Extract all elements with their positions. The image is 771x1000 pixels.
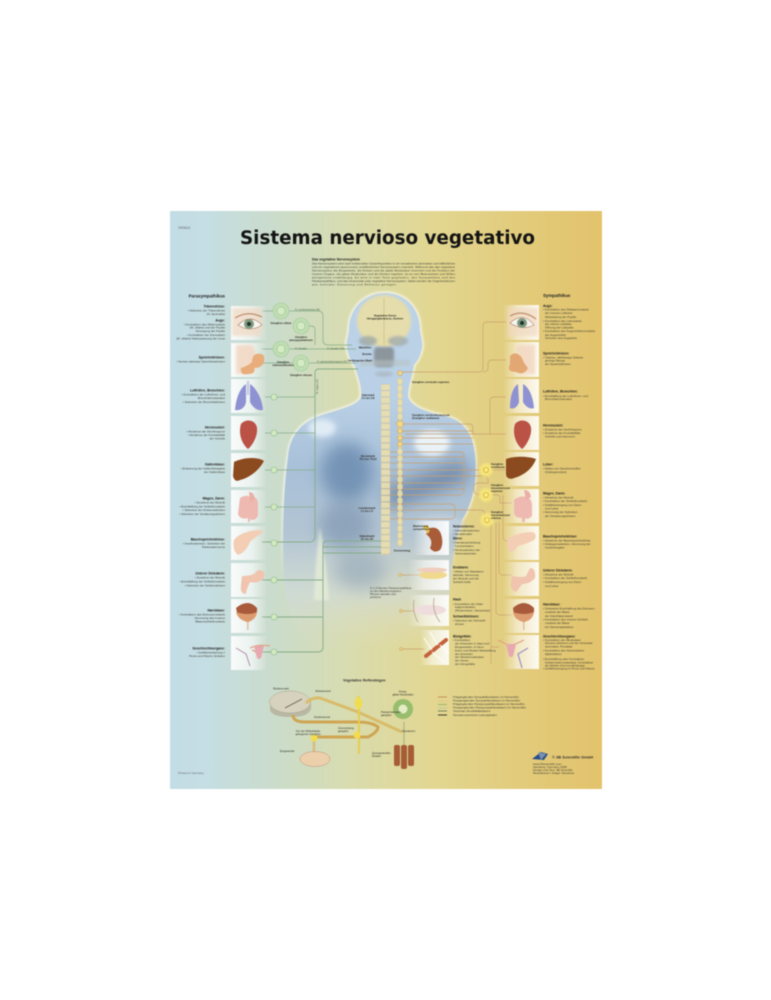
right text blocks: • Glukagonsekretion, Hemmung der xyxy=(543,542,591,546)
right text blocks: • Gefäßverengung von Darm xyxy=(543,503,582,507)
left text blocks: • Sekretion der Tränendrüse xyxy=(188,308,225,312)
left text blocks: Herzmuskel: xyxy=(205,426,225,430)
center anatomical labels: N. glossopharyngeus (IX) xyxy=(317,360,347,364)
illustrator credit: Printed in Germany xyxy=(178,771,204,775)
right text blocks: und Leber xyxy=(545,506,559,510)
right text blocks: Vortreten des Augapfels xyxy=(545,336,577,340)
middle text blocks: • Noradrenalin xyxy=(453,532,472,536)
left text blocks: • Zunahme der Motorik xyxy=(195,500,225,504)
center anatomical labels: L1 bis L5 xyxy=(361,509,374,513)
center anatomical labels: Sakralmark xyxy=(359,534,375,538)
center anatomical labels: Vegetative Kerne xyxy=(374,314,397,318)
icon: right pancreas xyxy=(507,532,536,552)
left text blocks: Penis und Klitoris: Erektion xyxy=(189,654,225,658)
center anatomical labels: Brücke xyxy=(362,352,372,356)
center anatomical labels: N. oculomotorius (III) xyxy=(295,308,320,312)
middle text blocks: der Motorik und der xyxy=(453,576,479,580)
center anatomical labels: pterygopalatinum xyxy=(289,338,313,342)
center anatomical labels: Ganglion cervicale superius xyxy=(412,380,450,384)
legend: Präganglionäre Sympathikusfasern im Nervenfilm xyxy=(453,695,519,699)
icon: right eye xyxy=(508,308,538,336)
legend: Postganglionäre Sympathikusfasern im Nervenfilm xyxy=(453,698,521,702)
right text blocks: Auge: xyxy=(543,304,553,308)
reflex arc diagram: ganglion xyxy=(338,729,349,733)
left text blocks: • Entleerung der Gallenflüssigkeit xyxy=(181,466,225,470)
right text blocks: geringe Menge xyxy=(545,358,565,362)
right text blocks: • Kontraktion des Dilatatormuskels xyxy=(543,308,589,312)
right text blocks: Geschlechtsorgane: xyxy=(543,634,576,638)
icon: blood vessel xyxy=(399,632,449,662)
reflex arc diagram: Vor der Wirbelsäule xyxy=(296,729,321,733)
middle text blocks: drüsen xyxy=(455,622,465,626)
middle text blocks: (Piloarrektion, Gänsehaut) xyxy=(455,608,490,612)
center anatomical labels: Ganglion xyxy=(295,335,307,339)
icon: right stomach and intestine xyxy=(514,490,532,522)
right text blocks: • Gefäßverengung in Penis und Klitoris xyxy=(543,666,595,670)
left text blocks: • Insulinsekretion, Sekretion der xyxy=(183,542,225,546)
middle text blocks: Schweißdrüsen: xyxy=(453,614,479,618)
reflex arc diagram: Hinterwurzel xyxy=(315,689,331,693)
muscle xyxy=(394,745,414,769)
center anatomical labels: Ganglion ciliare xyxy=(271,321,292,325)
left text blocks: Bronchialmuskulatur xyxy=(198,396,225,400)
legend xyxy=(438,695,527,717)
head: brain and face xyxy=(357,295,411,377)
left text blocks: • Kontraktion des Ziliarmuskels xyxy=(184,322,225,326)
right text blocks: Öffnung der Lidspalte xyxy=(545,326,574,330)
right text blocks: der Speicheldrüsen xyxy=(545,362,571,366)
center anatomical labels: sympathisch xyxy=(413,527,430,531)
right text blocks: (Ductus deferens und der Vesiculae xyxy=(545,641,593,645)
publisher logo and address: Illustrationen: Holger Vanselow xyxy=(533,771,575,775)
icon: left heart xyxy=(240,421,257,449)
right text blocks: • Visköse, zähflüssige Sekrete xyxy=(543,356,584,360)
left text blocks: • Kontraktion der Luftröhren- und xyxy=(181,392,225,396)
middle text blocks: der Venen xyxy=(455,658,469,662)
left text blocks: (N. lacrimalis) xyxy=(207,312,225,316)
right text blocks: der Eileiter (hormonabhängig) xyxy=(545,664,585,668)
left text blocks: • Kontraktion des Detrusormuskels xyxy=(179,612,225,616)
legend: Somatomotorische Leitungsbahn xyxy=(453,713,497,717)
right text blocks: • Gefäßverengung von Darm xyxy=(543,580,582,584)
intro text block xyxy=(312,258,456,286)
right text blocks: • Kontraktion des Augenhöhlenmuskels xyxy=(543,329,596,333)
left text blocks: der Gallenblase xyxy=(204,470,225,474)
left text blocks: Verengung der Pupille xyxy=(195,329,225,333)
right text blocks: Bronchialmuskulatur xyxy=(545,397,572,401)
right text blocks: der oberen Lidplatte xyxy=(545,322,572,326)
left text blocks: • Gefäßerweiterung = xyxy=(197,650,225,654)
middle text blocks: • Reninsekretion der xyxy=(453,548,480,552)
middle text blocks: • Kontraktion xyxy=(453,638,470,642)
left text blocks: Auge: xyxy=(215,318,225,322)
publisher logo and address xyxy=(532,752,593,775)
right text blocks: Unterer Dickdarm: xyxy=(543,568,573,572)
intro text block: inneren Organe, die glatte Muskulatur und die Drüsen reguliert, ist es vom Bewusstsein und Willen xyxy=(312,272,455,276)
center anatomical labels: (Ganglion stellatum) xyxy=(412,416,439,420)
right text blocks: • Abnahme der Bauchspeicheldrüse xyxy=(543,538,591,542)
right text blocks: • Abbau von Speicherstoffen xyxy=(543,466,581,470)
icon: left lungs xyxy=(235,381,263,410)
middle text blocks: • Harnausscheidung, xyxy=(453,540,481,544)
right text blocks: • Erschlaffung oder Kontraktion xyxy=(543,657,585,661)
center anatomical labels: Verlängertes Mark xyxy=(348,358,372,362)
title: Sistema nervioso vegetativo xyxy=(240,228,535,249)
publisher logo and address: Hamburg, Germany 2008 xyxy=(533,765,567,769)
spine: vertebrae column xyxy=(381,384,390,555)
right text blocks xyxy=(543,304,596,670)
middle text blocks: der Arteriolen xyxy=(455,652,473,656)
icon: left lower colon xyxy=(241,570,264,594)
icon: left reproductive organs xyxy=(236,645,270,666)
center anatomical labels: Markstrang xyxy=(413,524,428,528)
center anatomical labels xyxy=(271,308,510,599)
middle text blocks: • Adrenalinsekretion xyxy=(453,528,480,532)
reflex arc diagram: Quergestreifter xyxy=(372,751,391,755)
right text blocks: der Verdauungsdrüsen xyxy=(545,514,576,518)
center anatomical labels: C1 bis C8 xyxy=(362,396,375,400)
middle text blocks: Eingeweiden; in Herz- xyxy=(455,645,484,649)
center anatomical labels: Ganglion xyxy=(491,462,503,466)
center anatomical labels: Lendenmark xyxy=(359,506,376,510)
left text blocks: • Erschlaffung der Schließmuskeln xyxy=(179,504,225,508)
icon: right reproductive organs xyxy=(498,640,528,668)
left text blocks: • Sekretion der Schleimdrüsen xyxy=(185,584,225,588)
legend: Postganglionäre Parasympathikusfasern im Nervenfilm xyxy=(453,706,527,710)
right text blocks: • Abnahme der Motorik xyxy=(543,496,574,500)
center anatomical labels: N. facialis (VII) xyxy=(327,346,345,350)
icon: left pancreas xyxy=(234,530,262,555)
left text blocks: • Sekretion der Bronchialdrüsen xyxy=(183,400,225,404)
right text blocks: Bauchspeicheldrüse: xyxy=(543,534,577,538)
right text blocks: Leber: xyxy=(543,462,553,466)
intro text block: weitgehend unabhängig. Es wird in zwei Teile gegliedert: den Sympathikus und den xyxy=(312,276,455,280)
intro text block: Das Nervensystem wird nach funktionellen Gesichtspunkten in ein somatisches (animales) und willkürliches xyxy=(312,262,456,266)
right text blocks: der inneren Lidheber xyxy=(545,311,573,315)
left text blocks: Luftröhre, Bronchien: xyxy=(190,388,225,392)
center anatomical labels: Ganglion xyxy=(277,360,289,364)
poster code: VR0610 xyxy=(178,226,190,230)
center anatomical labels: Brustmark xyxy=(361,454,375,458)
right text blocks: Harnblase: xyxy=(543,602,561,606)
left text blocks: Pankreasenzyme xyxy=(202,545,225,549)
middle text blocks: • Kontraktion der Haar- xyxy=(453,602,484,606)
intro text block: und ein vegetatives (autonomes) unwillkürliches Nervensystem unterteilt. Während das das vegetative xyxy=(312,265,455,269)
center anatomical labels: Ganglion xyxy=(491,483,503,487)
reflex arc diagram xyxy=(270,686,416,769)
heading: sympathikus: Sympathikus xyxy=(543,293,571,298)
icon: left salivary glands xyxy=(236,345,264,374)
ganglia xyxy=(310,697,362,742)
intro text block: aus zentraler Steuerung und Reflexen geregelt. xyxy=(312,282,397,286)
left text blocks xyxy=(176,304,225,658)
reflex arc diagram: Muskel xyxy=(372,754,381,758)
right text blocks: und Leber xyxy=(545,584,559,588)
poster background xyxy=(170,211,602,789)
center anatomical labels: Plexus sacralis und xyxy=(370,592,396,596)
reflex arc diagram: glatte Muskulatur xyxy=(392,692,414,696)
left text blocks: Harnblase: xyxy=(207,608,225,612)
left text blocks: Blasenschließmuskels xyxy=(195,620,225,624)
right text blocks: (Ejakulation) xyxy=(545,652,562,656)
left text blocks: Hemmung des inneren xyxy=(195,616,225,620)
icon: right liver xyxy=(506,457,536,479)
right text blocks: • Kontraktion des inneren Schließ- xyxy=(543,618,588,622)
icon: right lungs xyxy=(510,384,534,409)
icon: left liver xyxy=(233,458,264,481)
right text blocks: • Kontraktion der Muskulatur xyxy=(543,638,581,642)
intro text block: Parasympathikus, und das intramurale oder vegetative Nervensystem. Dabei werden die Organfunktionen xyxy=(312,279,455,283)
right text blocks: bei Samenejakulation xyxy=(545,625,574,629)
heading: parasympathikus: Parasympathikus xyxy=(189,294,226,298)
center anatomical labels: mesentericum xyxy=(491,486,510,490)
right text blocks: • Erschlaffung der Luftröhren- und xyxy=(543,394,588,398)
middle text blocks: der Skelettmuskulatur xyxy=(455,655,484,659)
right text blocks: Herzmuskel: xyxy=(543,424,563,428)
publisher logo and address: © 3B Scientific GmbH xyxy=(552,754,593,760)
left text blocks: • Abnahme der Herzfrequenz xyxy=(186,430,225,434)
right text blocks: der Harnblasenwand xyxy=(545,614,573,618)
reflex arc diagram: Vorderwurzel xyxy=(314,715,331,719)
right text blocks: muskels der Blase xyxy=(545,621,570,625)
icon: right heart xyxy=(514,421,531,449)
right text blocks: seminales, Prostata) xyxy=(545,644,572,648)
green ganglia parasympathetic xyxy=(271,303,309,655)
center anatomical labels: zu den Beckenorganen: xyxy=(370,589,402,593)
intro text block: Nervensystem die Eingeweide, die Drüsen und die glatte Muskulatur innerviert und die Funktion der xyxy=(312,268,455,272)
middle text blocks: der Hirngefäße xyxy=(455,662,475,666)
right text blocks: Magen, Darm: xyxy=(543,492,565,496)
middle text blocks: aktivität, Hemmung xyxy=(453,573,479,577)
middle text blocks: Schließ-Hülle xyxy=(453,580,471,584)
middle text blocks: Konzentration xyxy=(455,544,474,548)
target organ xyxy=(300,752,330,766)
left text blocks: Speicheldrüsen: xyxy=(199,356,225,360)
left organ tiles xyxy=(231,306,267,670)
middle text blocks: kranz und Muskel Weitstellung xyxy=(455,648,496,652)
center anatomical labels: S1 bis S5 xyxy=(361,537,374,541)
left text blocks: (M. ciliaris) Nahanpassung der Linse xyxy=(176,336,225,340)
nerve tracks xyxy=(306,698,402,732)
labels: Rückenmark xyxy=(273,686,289,690)
middle text blocks: balgmuskulatur xyxy=(455,605,475,609)
human body silhouette xyxy=(283,293,476,660)
left text blocks: • Erschlaffung der Schließmuskeln xyxy=(179,580,225,584)
middle text blocks: • Sekretion der Schweiß- xyxy=(453,618,486,622)
icon: right bladder xyxy=(513,603,534,630)
legend: Viszerale Sensibilitätsfasern xyxy=(453,709,491,713)
reflex arc heading: Vegetative Reflexbögen xyxy=(343,678,386,682)
right text blocks: (Glykogenolyse) xyxy=(545,470,567,474)
center anatomical labels: Ganglion cervicothoracicum xyxy=(412,413,450,417)
left text blocks: der Vorhöfe xyxy=(209,436,225,440)
middle text blocks: Blutgefäße: xyxy=(453,634,472,638)
left text blocks: (M. ciliaris) und der Pupille xyxy=(190,326,225,330)
right text blocks: • Schwache Erschlaffung des Detrusor- xyxy=(543,606,595,610)
spinal cord disc xyxy=(270,691,311,717)
center anatomical labels: inferius xyxy=(491,516,502,520)
reflex arc diagram: Drüse, xyxy=(399,690,407,694)
gland xyxy=(393,699,413,719)
right text blocks: • Zunahme der Kontraktilität xyxy=(543,431,580,435)
left text blocks: • Kontraktion der Irismuskeln xyxy=(187,333,225,337)
left text blocks: Geschlechtsorgane: xyxy=(192,646,225,650)
right text blocks: • Abnahme der Motorik xyxy=(543,572,574,576)
publisher logo and address: www.3bscientific.com xyxy=(533,762,562,766)
right text blocks: • Zunahme der Herzfrequenz xyxy=(543,428,582,432)
center anatomical labels: Th1 bis Th12 xyxy=(359,457,377,461)
center anatomical labels: mesentericum xyxy=(491,513,510,517)
sympathetic trunk beads xyxy=(396,378,404,546)
center anatomical labels: Halsmark xyxy=(362,393,375,397)
icon: skin cross section xyxy=(399,598,446,622)
reflex arc diagram: Eingeweide xyxy=(280,749,295,753)
intro text block: Das vegetative Nervensystem xyxy=(312,258,360,262)
center anatomical labels: Ganglion xyxy=(491,510,503,514)
center anatomical labels: S 1-3 Nerven Parasympathikus xyxy=(370,586,412,590)
icon: right lower colon xyxy=(511,568,535,592)
parasympathetic nerve lines xyxy=(262,311,381,652)
icon: left stomach and intestine xyxy=(238,492,258,522)
center anatomical labels: Hirnganglienkerne, Zentren xyxy=(367,316,403,320)
sympathetic chain ganglia xyxy=(397,371,403,446)
right text blocks: Weitstellung der Pupille xyxy=(545,315,577,319)
right text blocks: • Kontraktion des Samenleiters xyxy=(543,648,585,652)
center anatomical labels: coeliacum xyxy=(491,465,505,469)
left text blocks: Tränendrüse: xyxy=(204,304,225,308)
reflex arc diagram: Grenzstrang- xyxy=(338,726,354,730)
left text blocks: Bauchspeicheldrüse: xyxy=(191,538,225,542)
reflex arc diagram: gelegenes Ganglion xyxy=(296,732,321,736)
middle text blocks: Haut: xyxy=(453,598,462,602)
middle text blocks: Niere: xyxy=(453,536,463,540)
icon: nerve plexus gut xyxy=(398,568,447,579)
right text blocks: • Kontraktion des Lidmuskels xyxy=(543,319,582,323)
yellow ganglia sympathetic xyxy=(478,462,495,528)
center anatomical labels: N. vagus (X) xyxy=(315,379,319,394)
sympathetic nerve lines xyxy=(390,322,512,664)
middle text blocks: Nebennieren: xyxy=(453,524,475,528)
middle text blocks: Nierenarteriolen xyxy=(455,552,477,556)
left text blocks: Magen, Darm: xyxy=(203,496,225,500)
right text blocks: Vorhöfe und Kammern xyxy=(545,434,575,438)
right text blocks: • Hemmung der Sekretion xyxy=(543,510,578,514)
reflex arc diagram: ganglion xyxy=(381,713,392,717)
middle text blocks: • Abbau von Mastdarm- xyxy=(453,570,484,574)
center anatomical labels: N. facialis xyxy=(295,346,307,350)
center anatomical labels: pelvicus xyxy=(370,595,381,599)
right organ tiles xyxy=(503,305,539,669)
left text blocks: Gallenblase: xyxy=(205,462,225,466)
inner organ tiles xyxy=(408,521,449,665)
center anatomical labels: Grenzstrang xyxy=(394,548,411,552)
reflex arc diagram: Paravertebrales xyxy=(381,710,401,714)
center anatomical labels: submandibulare xyxy=(272,363,294,367)
center anatomical labels: superius xyxy=(491,489,503,493)
left text blocks: • Abnahme der Kontraktilität xyxy=(188,433,225,437)
middle text blocks xyxy=(453,524,496,666)
right text blocks: muskels der Blase xyxy=(545,610,570,614)
right text blocks: Insulinfreigabe xyxy=(545,546,565,550)
reflex arc diagram: Spinalnerv xyxy=(402,729,416,733)
center anatomical labels: Ganglion oticum xyxy=(290,373,313,377)
icon: left eye xyxy=(232,308,262,336)
left text blocks: Unterer Dickdarm: xyxy=(195,572,225,576)
left text blocks: • Seröse wässrige Speichelsekretion xyxy=(176,360,225,364)
right text blocks: • Kontraktion der Schließmuskeln xyxy=(543,576,588,580)
middle text blocks: Enddarm: xyxy=(453,566,469,570)
middle text blocks: der Arteriolen in Haut und xyxy=(455,642,489,646)
right text blocks: • Kontraktion der Schließmuskeln xyxy=(543,499,588,503)
publisher logo and address: Design und Text: 3B Scientific xyxy=(533,768,573,772)
right text blocks: Gebärmuttermuskulatur, Kontraktion xyxy=(545,660,594,664)
right text blocks: der Augenhöhle xyxy=(545,333,566,337)
icon: right salivary glands xyxy=(509,345,535,374)
left text blocks: • Zunahme der Motorik xyxy=(195,576,225,580)
legend: Präganglionäre Parasympathikusfasern im Nervenfilm xyxy=(453,702,525,706)
right text blocks: Speicheldrüsen: xyxy=(543,352,569,356)
left text blocks: • Sekretion der Verdauungsdrüsen xyxy=(179,512,225,516)
icon: kidney with adrenal xyxy=(423,525,442,552)
left text blocks: • Sekretion der Drüsensekretion xyxy=(183,508,225,512)
icon: left bladder xyxy=(236,603,257,630)
right text blocks: Luftröhre, Bronchien: xyxy=(543,390,578,394)
center anatomical labels: Mittelhirn xyxy=(359,346,372,350)
